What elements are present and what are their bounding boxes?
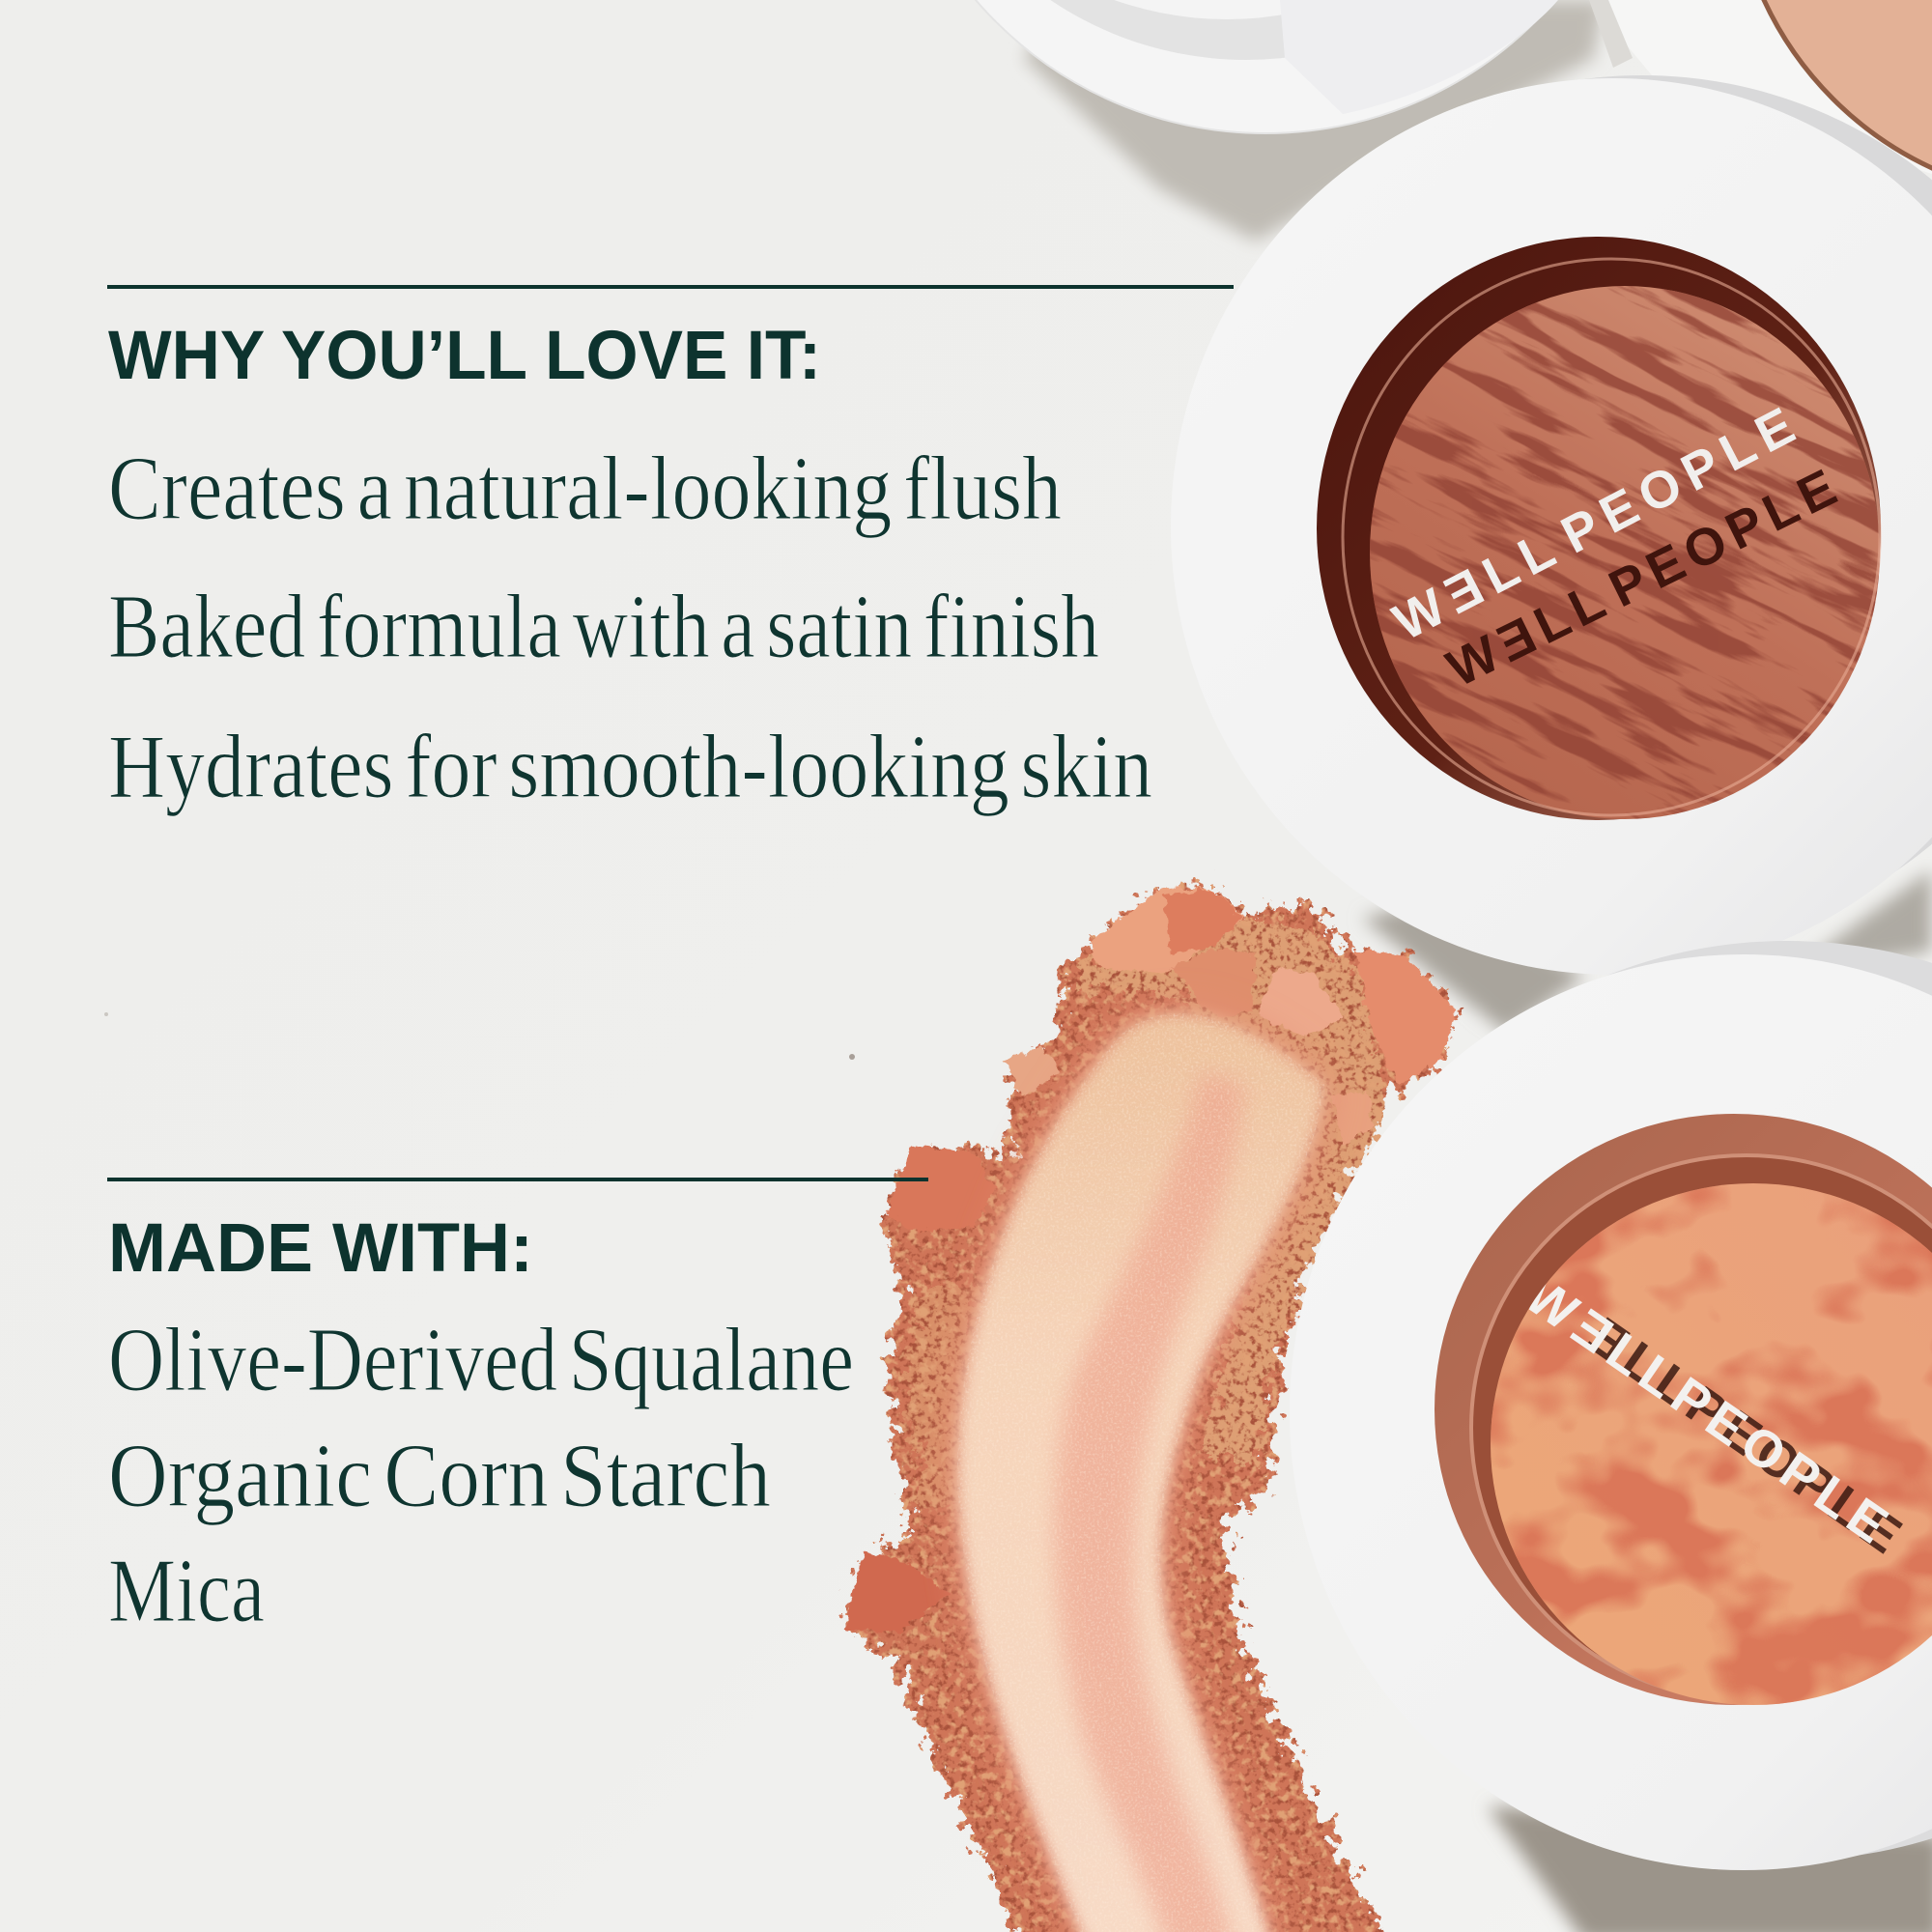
pink streak — [1055, 1072, 1244, 1932]
rule — [107, 285, 1234, 289]
logo shadow print: ƎLLPEOPLE — [1577, 1307, 1912, 1565]
powder specks — [104, 1012, 855, 1060]
pressed powder with marbling — [1478, 1169, 1932, 1710]
benefit 1: Creates a natural-looking flush — [108, 439, 1062, 539]
compact: peach blush — [1290, 941, 1932, 1870]
pressed powder with marbling — [1370, 286, 1880, 819]
tan powder zone — [1065, 912, 1386, 1466]
band sparkle — [957, 1013, 1324, 1932]
logo white print: WƎLL PEOPLE — [1384, 397, 1804, 652]
pan rim — [1317, 237, 1881, 820]
section: why you'll love it — [107, 285, 1234, 817]
powder chunks — [844, 887, 1457, 1633]
glass ring — [1343, 259, 1880, 815]
section: made with — [107, 1178, 928, 1641]
heading: WHY YOU’LL LOVE IT: — [108, 318, 821, 394]
pan rim — [1435, 1114, 1932, 1705]
compact side wall — [1314, 941, 1932, 1861]
cast shadows — [1024, 0, 1932, 1932]
rule — [107, 1178, 928, 1181]
left tan crumbs — [905, 1282, 974, 1516]
ingredient 1: Olive-Derived Squalane — [108, 1310, 854, 1410]
heading: MADE WITH: — [108, 1210, 533, 1287]
ingredient 2: Organic Corn Starch — [108, 1426, 771, 1526]
shimmer band — [957, 1013, 1324, 1932]
compact: deep bronze blush — [1196, 75, 1932, 974]
logo white print: WƎLLPEOPLE — [1515, 1265, 1898, 1554]
crumbled outer powder — [844, 887, 1454, 1932]
top compact lid — [884, 0, 1647, 133]
red grain — [844, 887, 1454, 1932]
logo shadow print: WƎLL PEOPLE — [1438, 459, 1845, 698]
benefit 2: Baked formula with a satin finish — [108, 577, 1099, 677]
band halo — [957, 1013, 1324, 1932]
ingredient 3: Mica — [108, 1541, 265, 1641]
compact face — [1290, 954, 1932, 1870]
top right compact with peach powder — [1589, 0, 1932, 200]
benefit 3: Hydrates for smooth-looking skin — [108, 717, 1152, 817]
tan grain — [844, 887, 1454, 1932]
powder swatch — [844, 887, 1457, 1932]
compact side wall — [1196, 75, 1932, 949]
compact face — [1171, 78, 1932, 975]
